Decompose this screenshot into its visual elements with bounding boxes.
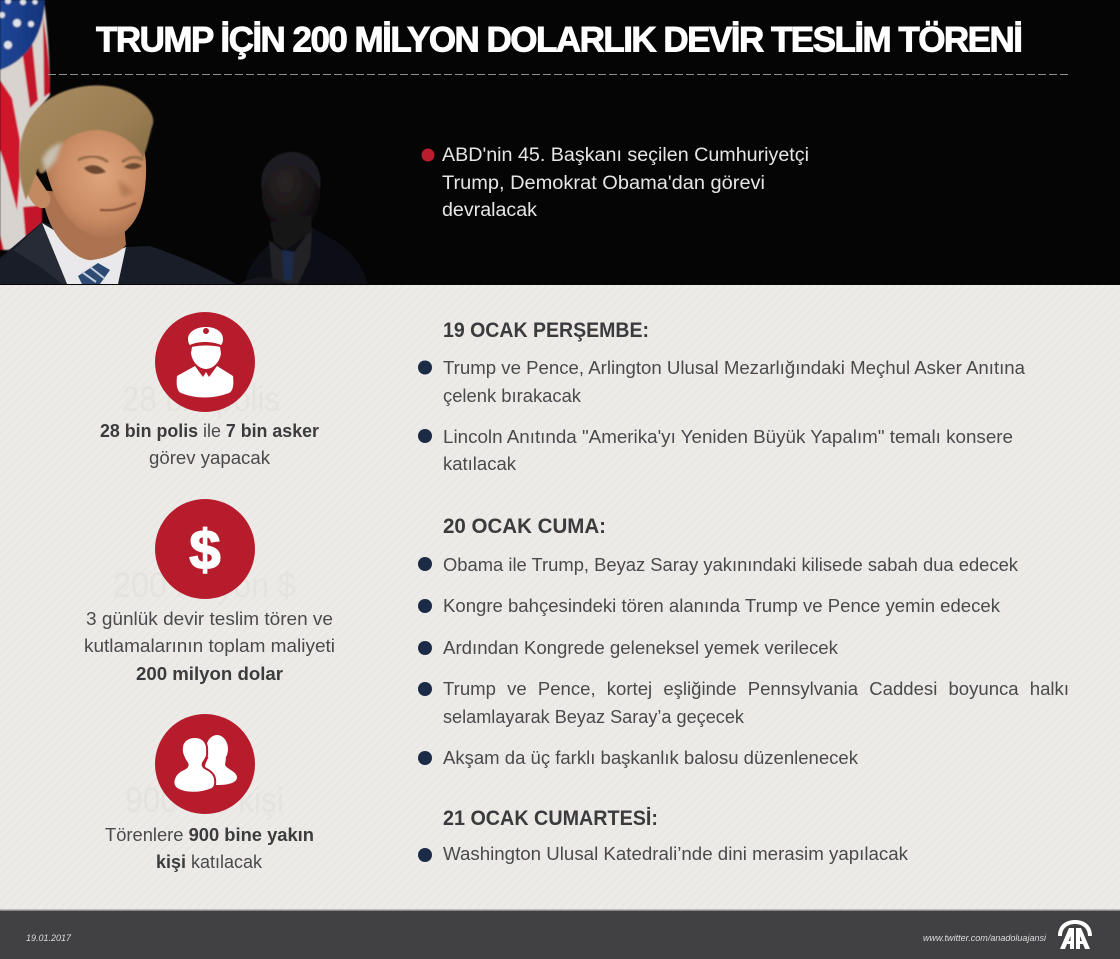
photo: american flag (0, 0, 50, 250)
logo: Anadolu Agency (1058, 920, 1092, 949)
list item: balo: Akşam da üç farklı başkanlık balosu düzenlenecek (443, 747, 859, 768)
stat text: 28 bin polis ile 7 bin asker (100, 421, 319, 441)
list item: Katedral: Washington Ulusal Katedrali’nde dini merasim yapılacak (443, 843, 909, 864)
stat text (84, 609, 335, 684)
stat text: Törenlere 900 bine yakın (105, 825, 314, 845)
icon: red bullet (422, 148, 434, 162)
list item: yemek: Ardından Kongrede geleneksel yemek verilecek (443, 637, 839, 658)
icon: dollar sign: $ (189, 518, 221, 581)
ghost text: 900 bin kişi: 900 bin kişi (125, 781, 284, 820)
title divider (48, 74, 1069, 76)
stat text: görev yapacak (149, 448, 271, 468)
panel: police stat (100, 312, 319, 468)
callout text: Trump, Demokrat Obama'dan görevi (442, 173, 765, 194)
header callout (422, 145, 809, 221)
list item: kortej: selamlayarak Beyaz Saray’a geçecek (443, 706, 745, 727)
icon: dollar sign (155, 499, 255, 599)
list item: Lincoln: katılacak (443, 453, 517, 474)
stat text: 200 milyon dolar (136, 664, 283, 684)
heading: 20 Ocak: 20 OCAK CUMA: (443, 515, 606, 538)
list item: Arlington (418, 357, 1026, 406)
panel: cost stat (84, 499, 335, 684)
title: TRUMP İÇİN 200 MİLYON DOLARLIK DEVİR TESLİM TÖRENİ (96, 20, 1023, 60)
heading: 19 Ocak: 19 OCAK PERŞEMBE: (443, 319, 649, 342)
footer bar (0, 910, 1120, 959)
list item: Arlington: çelenk bırakacak (443, 385, 582, 406)
ghost text: 200 milyon $: 200 milyon $ (113, 566, 296, 605)
social link: www.twitter.com/anadoluajansi (923, 933, 1047, 944)
stat text (105, 825, 314, 872)
photo: Obama in background (240, 152, 368, 284)
list item: Lincoln: Lincoln Anıtında "Amerika'yı Yeniden Büyük Yapalım" temalı konsere (443, 426, 1013, 447)
stat text: 3 günlük devir teslim tören ve (86, 609, 333, 629)
stat text: kutlamalarının toplam maliyeti (84, 636, 335, 656)
list item: kortej: Trump ve Pence, kortej eşliğinde Pennsylvania Caddesi boyunca halkı (443, 678, 1069, 699)
panel: 19 Ocak schedule (418, 319, 1026, 474)
heading: 21 Ocak: 21 OCAK CUMARTESİ: (443, 807, 658, 830)
panel: 21 Ocak schedule (418, 807, 909, 864)
list item: kortej (418, 678, 1069, 727)
list item: Arlington: Trump ve Pence, Arlington Ulusal Mezarlığındaki Meçhul Asker Anıtına (443, 357, 1026, 378)
callout text: ABD'nin 45. Başkanı seçilen Cumhuriyetçi (442, 145, 809, 166)
callout text (442, 145, 809, 221)
icon: police officer (155, 312, 255, 412)
list item: Lincoln (418, 426, 1013, 474)
stat text (100, 421, 319, 468)
photo: Trump portrait (0, 85, 236, 284)
icon: two people (155, 714, 255, 814)
page background (0, 284, 1120, 910)
list item: Kongre: Kongre bahçesindeki tören alanında Trump ve Pence yemin edecek (443, 595, 1001, 616)
ghost text: 28 bin polis: 28 bin polis (122, 380, 280, 419)
stat text: kişi katılacak (156, 852, 263, 872)
header panel (0, 0, 1120, 285)
callout text: devralacak (442, 200, 538, 221)
panel: 20 Ocak schedule (418, 515, 1069, 768)
date: 19.01.2017 (26, 933, 72, 944)
list item: Obama ile Trump: Obama ile Trump, Beyaz Saray yakınındaki kilisede sabah dua edecek (443, 554, 1019, 575)
panel: attendance stat (105, 714, 314, 872)
